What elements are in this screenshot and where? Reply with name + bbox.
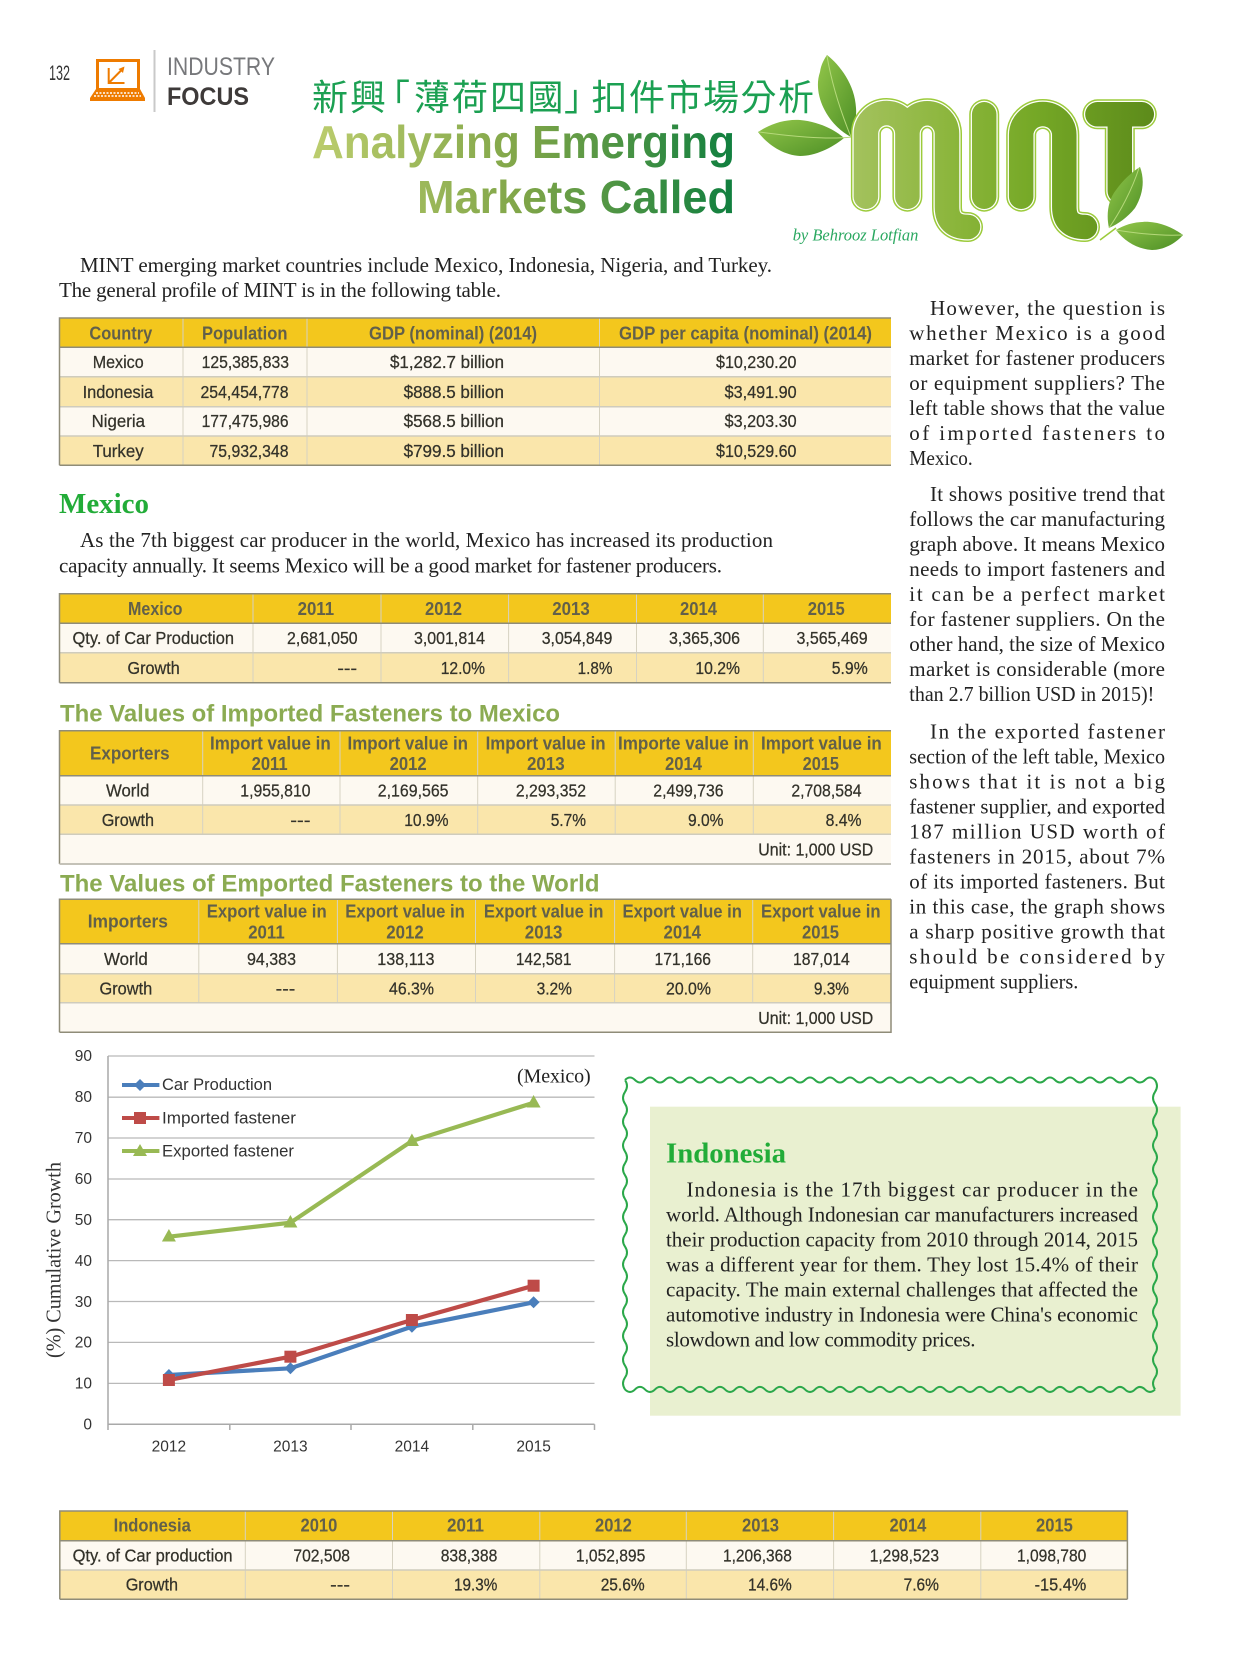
y axis labels: 40 [75, 1253, 92, 1270]
table row: quantity of car production [72, 628, 868, 648]
table header row: 2010 [300, 1515, 337, 1536]
paragraph: exported fastener section: section of the left table, Mexico [909, 744, 1165, 768]
table row: growth [126, 1575, 1086, 1595]
table row: quantity of car production: 3,001,814 [414, 628, 485, 648]
table header row: 2015 [1036, 1515, 1073, 1536]
table row: growth [128, 658, 868, 678]
table row: Turkey: $799.5 billion [404, 441, 504, 461]
table row: Mexico: $1,282.7 billion [390, 352, 504, 372]
table header row: Export value in [622, 901, 742, 922]
table row: world: 142,581 [516, 949, 571, 969]
table row: growth: 12.0% [441, 658, 485, 678]
table row: growth: --- [330, 1575, 350, 1595]
table row: growth: 25.6% [601, 1575, 645, 1595]
table header row: 2012 [425, 598, 462, 619]
table row: Mexico: $10,230.20 [716, 352, 797, 372]
paragraph: exported fastener section: fasteners in 2015, about 7% [909, 844, 1165, 868]
paragraph: exported fastener section: In the exported fastener [930, 720, 1165, 744]
table row: Indonesia: Indonesia [83, 382, 154, 402]
table row: growth: 14.6% [748, 1575, 792, 1595]
paragraph: is Mexico a good market: market for fastener producers [909, 346, 1165, 370]
chart region label: (Mexico) [517, 1066, 591, 1088]
table row: growth: --- [290, 810, 311, 830]
table header row: Mexico [128, 598, 182, 619]
intro paragraph: The general profile of MINT is in the following table. [59, 278, 501, 302]
table: Mexico car production [60, 594, 891, 683]
table row: world: 138,113 [377, 949, 434, 969]
table header row: Indonesia [114, 1515, 191, 1536]
table header row: Country [89, 322, 153, 344]
table header row: Import value in [761, 732, 882, 753]
table header row: 2014 [890, 1515, 927, 1536]
table row: growth: 8.4% [826, 810, 862, 830]
table row: Turkey: Turkey [93, 441, 144, 461]
table header row: GDP (nominal) (2014) [369, 322, 537, 344]
table row: world: World [104, 949, 148, 969]
table row: growth [100, 978, 849, 998]
table row: growth: 5.7% [551, 810, 586, 830]
paragraph: positive trend: for fastener suppliers. On the [909, 607, 1165, 631]
byline: by Behrooz Lotfian [793, 226, 918, 245]
x axis labels: 2015 [516, 1439, 551, 1456]
table row: growth: Growth [128, 658, 180, 678]
paragraph: exported fastener section: a sharp positive growth that [909, 920, 1165, 944]
paragraph: exported fastener section: of its imported fasteners. But [909, 870, 1165, 894]
heading: imported fasteners: The Values of Imported Fasteners to Mexico [60, 701, 560, 728]
heading: exported fasteners: The Values of Emported Fasteners to the World [60, 871, 600, 898]
paragraph: is Mexico a good market: or equipment suppliers? The [909, 371, 1165, 395]
table row: world: World [106, 781, 149, 801]
table header row [90, 732, 882, 774]
series: imported fastener [163, 1280, 540, 1386]
paragraph: positive trend: than 2.7 billion USD in 2015)! [909, 682, 1154, 706]
unit note: Unit: 1,000 USD [758, 1008, 873, 1028]
table row: growth: 10.2% [695, 658, 740, 678]
Indonesia paragraph: world. Although Indonesian car manufacturers increased [666, 1203, 1138, 1227]
legend: Imported fastener [162, 1108, 296, 1127]
table header row: 2014 [665, 753, 703, 774]
table row: Indonesia: 254,454,778 [200, 382, 288, 402]
y axis labels: 70 [75, 1130, 92, 1147]
table row: growth: 5.9% [832, 658, 868, 678]
table row: Turkey: 75,932,348 [210, 441, 288, 461]
table header row: GDP per capita (nominal) (2014) [619, 322, 872, 344]
paragraph: exported fastener section: should be considered by [909, 944, 1166, 968]
y axis labels: 30 [75, 1294, 92, 1311]
table row: growth: 9.0% [688, 810, 724, 830]
table row: quantity of car production: 1,206,368 [723, 1545, 792, 1565]
table row: growth: --- [337, 658, 357, 678]
table row: quantity of car production: 3,565,469 [796, 628, 868, 648]
table header row: 2015 [803, 753, 839, 774]
table row: quantity of car production: 3,054,849 [542, 628, 612, 648]
y axis labels: 10 [75, 1376, 92, 1392]
section label: Industry Focus: INDUSTRY [167, 53, 275, 81]
Indonesia paragraph: slowdown and low commodity prices. [666, 1328, 976, 1352]
table header row: 2013 [552, 598, 590, 619]
table header row: Population [202, 322, 288, 344]
panel: Indonesia callout [623, 1078, 1181, 1416]
table header row: 2015 [808, 598, 845, 619]
table header row: Export value in [345, 901, 465, 922]
section label: Industry Focus: FOCUS [167, 83, 249, 111]
table row: growth [102, 810, 861, 830]
table row: world: 1,955,810 [240, 781, 311, 801]
table row: Nigeria: Nigeria [92, 411, 145, 431]
table row: Mexico: 125,385,833 [202, 352, 289, 372]
table header row: 2012 [390, 753, 427, 774]
Indonesia paragraph: capacity. The main external challenges that affected the [666, 1278, 1138, 1302]
table header row [114, 1515, 1073, 1536]
paragraph: is Mexico a good market: However, the question is [930, 296, 1165, 320]
table row: world: 2,293,352 [516, 781, 586, 801]
table header row: 2011 [298, 598, 334, 619]
y axis labels: 60 [75, 1171, 92, 1188]
Indonesia paragraph: automotive industry in Indonesia were China's economic [666, 1303, 1138, 1327]
table header row: 2014 [664, 921, 702, 942]
table header row [128, 598, 845, 619]
page number: 132 [49, 62, 70, 85]
paragraph: is Mexico a good market: of imported fasteners to [909, 421, 1165, 445]
right column text [909, 296, 1166, 994]
y axis labels: 90 [75, 1048, 92, 1065]
table row: quantity of car production [73, 1545, 1087, 1565]
legend: Exported fastener [162, 1141, 294, 1160]
title: Chinese: 新興「薄荷四國」扣件市場分析 [312, 77, 814, 118]
x axis labels: 2012 [152, 1439, 186, 1456]
Indonesia paragraph: was a different year for them. They lost 15.4% of their [666, 1253, 1138, 1277]
table row: growth: Growth [126, 1575, 178, 1595]
paragraph: exported fastener section: in this case, the graph shows [909, 894, 1165, 918]
x axis labels [152, 1439, 551, 1456]
legend [122, 1075, 296, 1160]
paragraph: exported fastener section: fastener supplier, and exported [909, 794, 1165, 818]
table header row: Exporters [90, 742, 170, 763]
table header row: 2014 [680, 598, 718, 619]
y axis labels [75, 1048, 92, 1434]
table row: growth: Growth [102, 810, 154, 830]
table row: world: 2,499,736 [653, 781, 724, 801]
table header row: Importe value in [618, 732, 749, 753]
heading: Indonesia: Indonesia [666, 1138, 786, 1170]
table row: world: 2,169,565 [378, 781, 448, 801]
table row: quantity of car production: 1,098,780 [1017, 1545, 1087, 1565]
heading: Mexico: Mexico [59, 488, 149, 520]
logo: MINT with mint leaves [758, 55, 1183, 250]
Indonesia paragraph: Indonesia is the 17th biggest car producer in the [686, 1178, 1138, 1202]
paragraph: is Mexico a good market: whether Mexico is a good [909, 321, 1166, 345]
title: English [312, 116, 735, 223]
paragraph: is Mexico a good market: Mexico. [909, 446, 973, 470]
table header row: 2011 [248, 921, 285, 942]
table header row: Importers [88, 911, 168, 932]
table: MINT country profile [60, 318, 891, 465]
table row: growth: 20.0% [666, 978, 711, 998]
table row: growth: Growth [100, 978, 152, 998]
paragraph: exported fastener section: 187 million USD worth of [909, 820, 1165, 844]
table header row: 2012 [595, 1515, 632, 1536]
y axis labels: 50 [75, 1212, 92, 1229]
table row: growth: 46.3% [389, 978, 434, 998]
table row: quantity of car production: 702,508 [293, 1545, 350, 1565]
table row: Mexico [93, 352, 797, 372]
paragraph: positive trend: graph above. It means Mexico [909, 532, 1165, 556]
paragraph: positive trend: It shows positive trend that [930, 482, 1165, 506]
paragraph: exported fastener section: shows that it is not a big [909, 770, 1166, 794]
table row: quantity of car production: 2,681,050 [287, 628, 358, 648]
table row: world: 94,383 [247, 949, 296, 969]
table row: Mexico: Mexico [93, 352, 144, 372]
x axis labels: 2014 [395, 1439, 430, 1456]
Mexico paragraph: capacity annually. It seems Mexico will be a good market for fastener producers. [59, 554, 722, 578]
table row: growth: 9.3% [814, 978, 849, 998]
paragraph: positive trend [909, 482, 1166, 706]
table row: Indonesia: $3,491.90 [725, 382, 797, 402]
line chart: Mexico cumulative growth [42, 1048, 595, 1456]
table row: growth: 3.2% [537, 978, 572, 998]
table header row: 2013 [525, 921, 562, 942]
paragraph: positive trend: market is considerable (more [909, 657, 1165, 681]
title: English: Analyzing Emerging [312, 116, 735, 168]
table row: world: 187,014 [793, 949, 850, 969]
paragraph: is Mexico a good market: left table shows that the value [909, 396, 1165, 420]
table row: Indonesia: $888.5 billion [404, 382, 504, 402]
table header row [88, 901, 881, 942]
table row: world [104, 949, 850, 969]
Indonesia paragraph [666, 1178, 1138, 1352]
table row: quantity of car production: 3,365,306 [669, 628, 740, 648]
table row: Nigeria: $3,203.30 [725, 411, 797, 431]
icon: laptop with chart [90, 60, 145, 101]
series: exported fastener [162, 1095, 541, 1242]
table row: world: 171,166 [654, 949, 711, 969]
table row: quantity of car production: 838,388 [441, 1545, 497, 1565]
Mexico paragraph [59, 528, 774, 578]
paragraph: exported fastener section [909, 720, 1166, 994]
section label: Industry Focus [154, 50, 275, 112]
x axis labels: 2013 [273, 1439, 308, 1456]
y axis labels: 80 [75, 1089, 92, 1106]
table row: growth: 1.8% [578, 658, 612, 678]
table row: quantity of car production: 1,298,523 [870, 1545, 939, 1565]
paragraph: positive trend: other hand, the size of Mexico [909, 632, 1165, 656]
table header row: Import value in [348, 732, 468, 753]
Indonesia paragraph: their production capacity from 2010 through 2014, 2015 [666, 1228, 1138, 1252]
y axis labels: 20 [75, 1334, 92, 1352]
table header row: 2012 [386, 921, 424, 942]
table row: growth: 19.3% [454, 1575, 497, 1595]
table: exported fasteners [60, 899, 891, 1032]
table header row: 2011 [447, 1515, 484, 1536]
table row: growth: -15.4% [1035, 1575, 1086, 1595]
table header row: 2013 [527, 753, 565, 774]
table row: Nigeria [92, 411, 797, 431]
intro paragraph: MINT emerging market countries include Mexico, Indonesia, Nigeria, and Turkey. [80, 253, 772, 277]
table header row [89, 322, 872, 344]
table row: world: 2,708,584 [791, 781, 862, 801]
y axis labels: 0 [83, 1416, 92, 1434]
table row: Nigeria: $568.5 billion [404, 411, 504, 431]
paragraph: positive trend: it can be a perfect market [909, 582, 1165, 606]
title: English: Markets Called [417, 171, 735, 223]
unit note: Unit: 1,000 USD [758, 840, 873, 860]
table header row: 2011 [252, 753, 288, 774]
table row: Indonesia [83, 382, 797, 402]
paragraph: exported fastener section: equipment suppliers. [909, 970, 1078, 994]
table row: quantity of car production: Qty. of Car production [73, 1545, 233, 1565]
table header row: Import value in [210, 732, 331, 753]
table row: growth: --- [276, 978, 295, 998]
series: car production [163, 1296, 540, 1381]
table header row: 2015 [802, 921, 839, 942]
y axis title: (%) Cumulative Growth [42, 1162, 66, 1358]
table: imported fasteners [60, 731, 891, 864]
table row: growth: 10.9% [404, 810, 448, 830]
table header row: 2013 [742, 1515, 779, 1536]
table row: quantity of car production: 1,052,895 [576, 1545, 645, 1565]
table header row: Export value in [207, 901, 327, 922]
table row: Turkey [93, 441, 797, 461]
Mexico paragraph: As the 7th biggest car producer in the world, Mexico has increased its production [80, 528, 774, 552]
table: Indonesia car production [60, 1511, 1127, 1599]
table header row: Export value in [761, 901, 881, 922]
table row: world [106, 781, 862, 801]
legend: Car Production [162, 1075, 272, 1094]
table row: Turkey: $10,529.60 [716, 441, 797, 461]
table header row: Export value in [484, 901, 603, 922]
paragraph: positive trend: needs to import fasteners and [909, 557, 1166, 581]
table row: growth: 7.6% [904, 1575, 939, 1595]
paragraph: is Mexico a good market [909, 296, 1166, 470]
table row: quantity of car production: Qty. of Car Production [72, 628, 234, 648]
intro paragraph [59, 253, 772, 302]
table header row: Import value in [486, 732, 606, 753]
paragraph: positive trend: follows the car manufacturing [909, 507, 1166, 531]
table row: Nigeria: 177,475,986 [202, 411, 289, 431]
